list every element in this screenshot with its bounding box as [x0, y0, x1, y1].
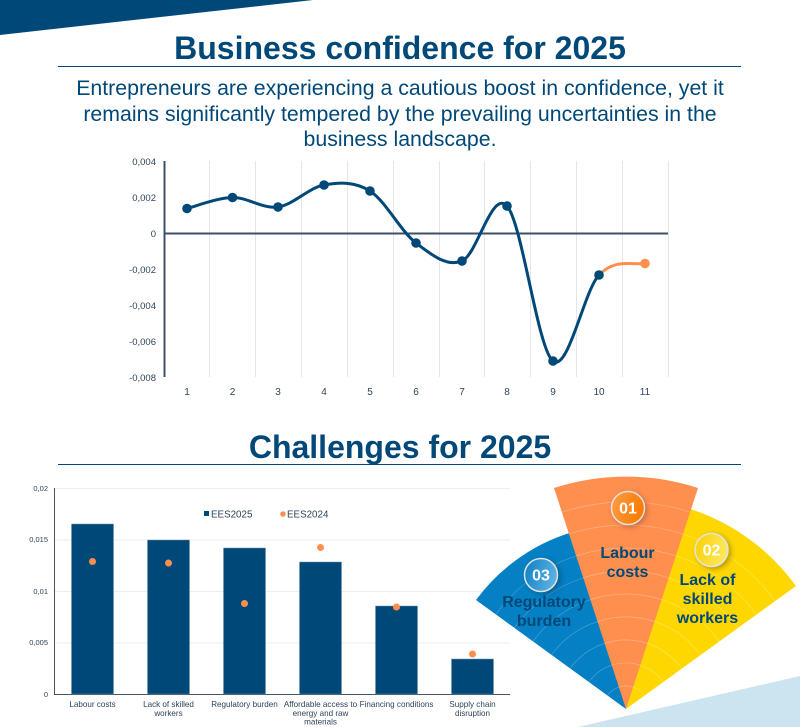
decorative corner: top-left navy wedge [0, 0, 313, 35]
x axis labels: 3 [275, 387, 281, 398]
category labels: Affordable access to [284, 700, 358, 709]
label: Labour costs: Labour [600, 545, 655, 562]
y axis labels: 0 [44, 690, 48, 699]
x axis labels: 8 [504, 387, 510, 398]
legend: EES2025 [211, 510, 253, 520]
y axis labels: 0,015 [29, 535, 48, 544]
x axis labels: 2 [230, 387, 236, 398]
navy series line [187, 183, 599, 362]
heading: Challenges for 2025: Challenges for 2025 [249, 429, 551, 465]
category labels: Labour costs [69, 700, 116, 709]
wedge: lack of skilled workers [626, 506, 796, 709]
category labels: Supply chain [449, 700, 496, 709]
y axis labels [129, 157, 156, 384]
data points [182, 180, 650, 366]
y axis labels: -0,008 [129, 373, 156, 384]
intro text block: Entrepreneurs are experiencing a cautious boost in confidence, yet it [76, 76, 724, 100]
badge 03 [524, 558, 561, 594]
label: Lack of skilled workers [676, 572, 738, 627]
x axis labels: 5 [367, 387, 373, 398]
badge 01 [612, 492, 647, 527]
x axis labels: 7 [459, 387, 465, 398]
y axis labels: 0,005 [29, 638, 48, 647]
y axis labels: 0 [151, 229, 156, 240]
wedge: labour costs [554, 477, 698, 709]
category labels: workers [153, 709, 183, 718]
intro text block: business landscape. [304, 127, 496, 151]
intro text block [76, 76, 724, 151]
badge 03: 03 [532, 568, 550, 584]
intro text block: remains significantly tempered by the prevailing uncertainties in the [83, 102, 717, 126]
title: Business confidence for 2025: Business confidence for 2025 [174, 30, 626, 66]
legend [204, 510, 329, 520]
category labels: Regulatory burden [211, 700, 278, 709]
category labels [69, 700, 496, 726]
x axis labels: 9 [550, 387, 556, 398]
fan diagram: top three challenges [476, 477, 796, 709]
y axis labels: 0,004 [132, 157, 156, 168]
x axis labels: 4 [321, 387, 327, 398]
category labels: materials [304, 718, 337, 726]
label: Regulatory burden [502, 594, 586, 630]
bar chart: challenges [29, 484, 510, 726]
label: Lack of skilled workers: skilled [683, 591, 732, 608]
x axis labels: 6 [413, 387, 419, 398]
dots EES2024 [89, 544, 476, 658]
label: Labour costs: costs [607, 564, 648, 581]
orange forecast line [599, 264, 645, 275]
line chart: business confidence [129, 157, 668, 398]
badge 02: 02 [703, 542, 720, 560]
y axis labels: 0,002 [132, 193, 156, 204]
label: Regulatory burden: burden [517, 613, 571, 630]
y axis labels: 0,01 [33, 587, 48, 596]
x axis labels: 11 [640, 387, 651, 398]
x axis labels: 10 [593, 387, 605, 398]
badge 01: 01 [619, 500, 637, 518]
badge 02 [695, 534, 731, 569]
decorative corner: bottom-right light blue wedge [578, 676, 800, 727]
legend: EES2024 [287, 510, 329, 520]
label: Lack of skilled workers: Lack of [679, 572, 736, 589]
wedge: regulatory burden [476, 530, 626, 709]
label: Regulatory burden: Regulatory [502, 594, 586, 611]
category labels: energy and raw [293, 709, 349, 718]
y axis labels: -0,004 [129, 301, 156, 312]
category labels: disruption [455, 709, 490, 718]
label: Lack of skilled workers: workers [676, 610, 738, 627]
y axis labels: -0,002 [129, 265, 156, 276]
x axis labels [184, 387, 651, 398]
label: Labour costs [600, 545, 655, 581]
y axis labels: 0,02 [33, 484, 48, 493]
x axis labels: 1 [184, 387, 190, 398]
y axis labels [29, 484, 48, 699]
category labels: Financing conditions [360, 700, 433, 709]
y axis labels: -0,006 [129, 337, 156, 348]
bars EES2025 [72, 524, 494, 694]
category labels: Lack of skilled [143, 700, 194, 709]
